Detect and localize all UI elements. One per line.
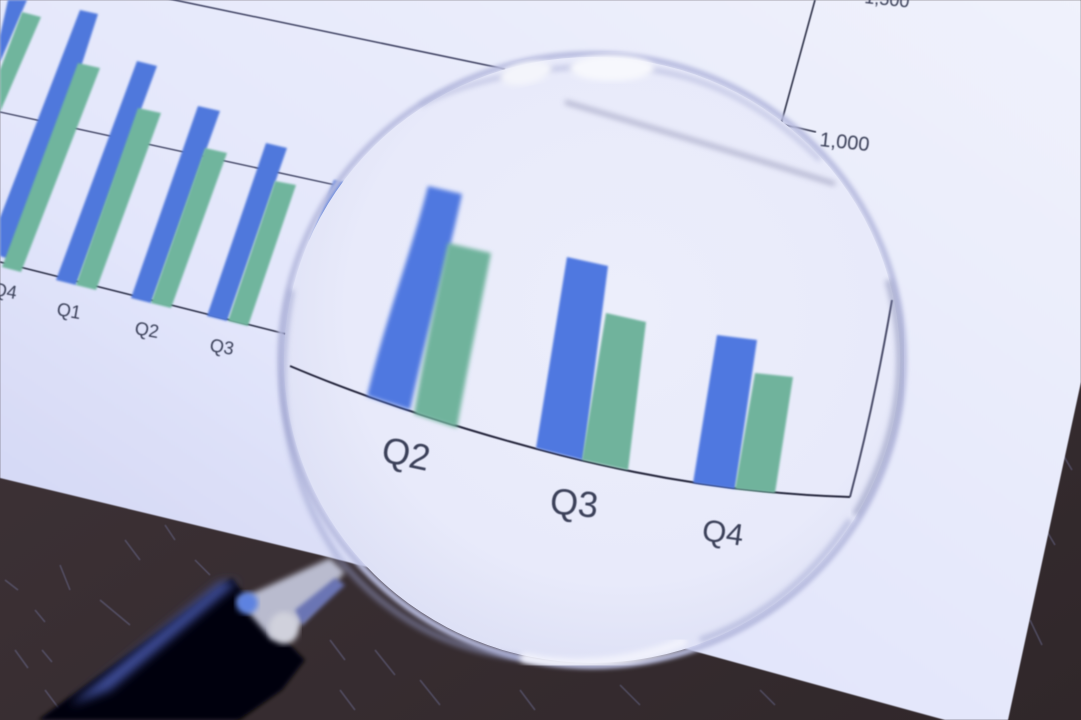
- rim highlight top: [420, 67, 820, 160]
- magnified Q2 blue bar: [367, 186, 462, 410]
- ferrule blue gap: [295, 578, 345, 625]
- magnified Q3 green bar: [582, 313, 646, 470]
- blue bars: [0, 0, 352, 321]
- magnified Q3 label: Q3: [548, 480, 600, 526]
- rim highlight left: [283, 290, 340, 560]
- grip blue highlight: [70, 582, 238, 705]
- magnified right axis: [850, 300, 892, 497]
- magnified Q4 green bar: [735, 373, 793, 493]
- lens face: [284, 57, 900, 663]
- chart outside the lens: [0, 0, 910, 359]
- axis tick: [781, 124, 816, 132]
- chart outside the lens: Q3: [208, 335, 235, 359]
- right axis: [781, 0, 815, 124]
- ferrule: [238, 558, 345, 640]
- magnified gridline: [565, 102, 835, 184]
- ferrule highlight: [269, 612, 299, 644]
- wood grain streaks: [5, 450, 1072, 710]
- rim highlight right: [855, 280, 900, 515]
- handle grip: [38, 578, 305, 720]
- middle gridline: [0, 112, 340, 186]
- rim highlight bottom right: [700, 520, 850, 640]
- magnified Q3 blue bar: [536, 257, 608, 460]
- top glare left: [498, 57, 554, 89]
- ferrule blue glint: [236, 592, 258, 614]
- rim highlight bottom left: [340, 560, 520, 658]
- outer quarter labels: Q1: [55, 299, 82, 323]
- chart outside the lens: Q2: [133, 318, 160, 342]
- magnified Q4 label: Q4: [700, 512, 746, 553]
- magnified baseline: [290, 366, 850, 497]
- magnified Q2 green bar: [414, 243, 491, 428]
- top glare right: [570, 55, 654, 81]
- magnifying lens: [280, 54, 904, 666]
- axis label 1,000: 1,000: [818, 129, 871, 156]
- lens rim: [280, 54, 904, 666]
- magnifying glass handle: [38, 558, 345, 720]
- chart baseline: [0, 262, 290, 335]
- green bars: [0, 12, 296, 326]
- magnified Q4 blue bar: [693, 335, 757, 489]
- magnified Q2 label: Q2: [378, 429, 434, 479]
- bottom glare: [525, 642, 682, 663]
- top gridline: [165, 0, 505, 69]
